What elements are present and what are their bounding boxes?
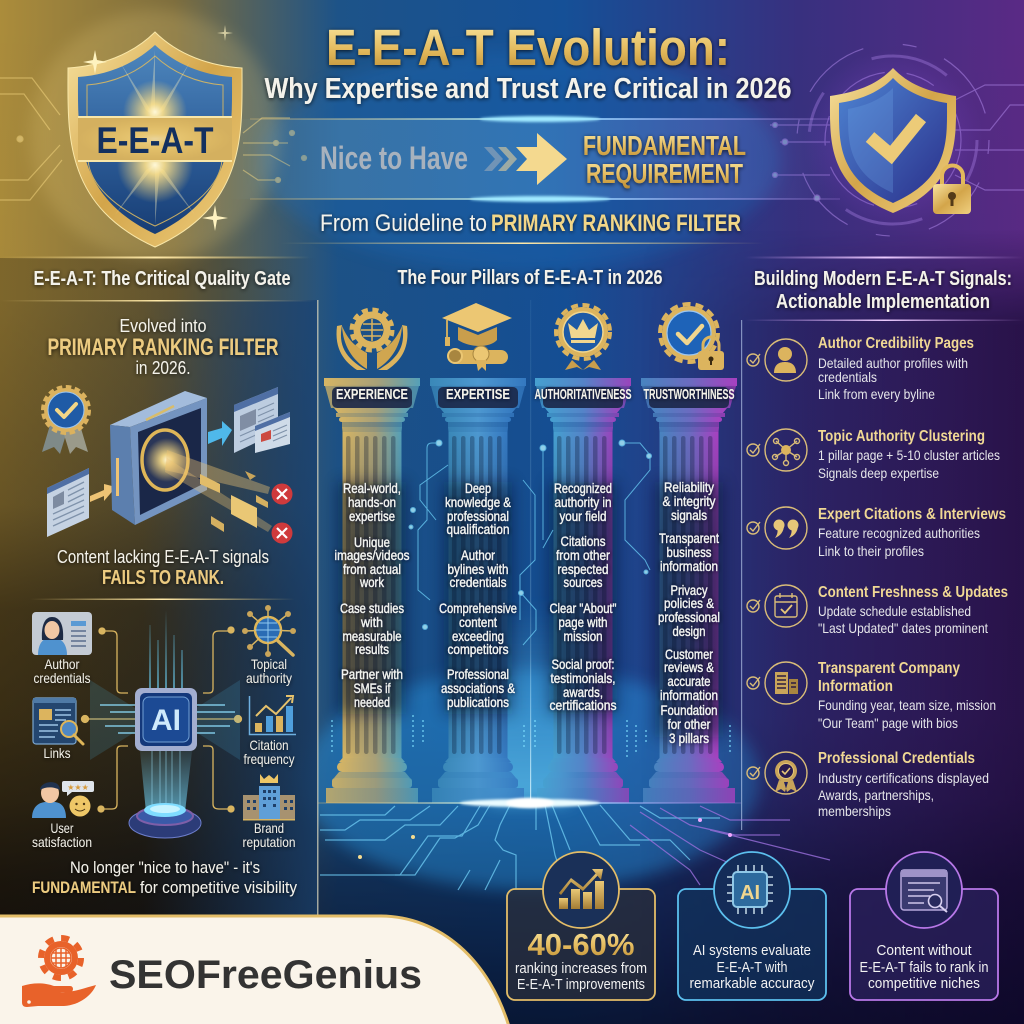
pillar text: trustworthiness: signals bbox=[671, 507, 707, 523]
icon: author credentials bbox=[32, 612, 92, 655]
label: citation frequency: Citation bbox=[250, 737, 288, 753]
signal: content freshness and updates: Update schedule established bbox=[818, 603, 971, 619]
pillar: authoritativeness bbox=[535, 378, 631, 803]
pillar: expertise bbox=[430, 378, 526, 803]
label: author credentials: Author bbox=[44, 656, 80, 672]
pillar text: authoritativeness: Recognized bbox=[554, 480, 612, 496]
brand name: SEOFreeGenius bbox=[109, 953, 422, 997]
icon: approved pages bbox=[234, 387, 290, 453]
panel: right column backdrop bbox=[679, 243, 1024, 1024]
floor glow bbox=[318, 798, 741, 808]
pillar text: experience: needed bbox=[354, 694, 390, 710]
pillar text: trustworthiness: design bbox=[672, 623, 706, 639]
stat card: AI systems: E-E-A-T with bbox=[716, 959, 788, 976]
pillar text: expertise: competitors bbox=[448, 641, 508, 657]
stat card: AI systems bbox=[678, 852, 826, 1000]
pillar text: experience: results bbox=[355, 641, 389, 657]
pillar text: experience: measurable bbox=[342, 628, 402, 644]
label: user satisfaction bbox=[32, 820, 92, 850]
label: author credentials: credentials bbox=[34, 670, 90, 686]
signal: content freshness and updates bbox=[747, 584, 1008, 636]
pillar text: expertise: Author bbox=[461, 547, 495, 563]
signal: author credibility pages bbox=[747, 335, 974, 402]
signal: expert citations and interviews: Link to their profiles bbox=[818, 543, 924, 559]
pillar text: authoritativeness: testimonials, bbox=[550, 670, 616, 686]
icon: user satisfaction bbox=[32, 781, 94, 818]
shift: nice to have to fundamental requirement: FUNDAMENTAL bbox=[583, 130, 746, 161]
pillar text: experience: Partner with bbox=[341, 666, 403, 682]
arrow: into filter bbox=[90, 484, 116, 502]
pillar text: experience bbox=[334, 480, 410, 710]
column headings: E-E-A-T: The Critical Quality Gate bbox=[34, 268, 290, 290]
data sprinkles between pillars bbox=[332, 715, 730, 760]
label: brand reputation bbox=[242, 820, 296, 850]
pillar text: experience: hands-on bbox=[348, 494, 396, 510]
icon: left shield E-E-A-T bbox=[30, 10, 280, 260]
stat card: content without E-E-A-T bbox=[850, 852, 998, 1000]
signal: professional credentials: Industry certifications displayed bbox=[818, 770, 989, 786]
closing statement: for competitive visibility bbox=[140, 878, 297, 897]
pillar text: trustworthiness: information bbox=[660, 687, 718, 703]
signal: transparent company information bbox=[747, 660, 996, 731]
pillar labels: AUTHORITATIVENESS bbox=[534, 386, 632, 403]
icon: page with magnifier bbox=[901, 870, 947, 912]
pillar text: authoritativeness bbox=[550, 480, 617, 713]
pillar text: experience: expertise bbox=[349, 508, 395, 524]
tagline: PRIMARY RANKING FILTER bbox=[491, 210, 741, 237]
label: user satisfaction: satisfaction bbox=[32, 834, 92, 850]
signal: topic authority clustering: Topic Authority Clustering bbox=[818, 428, 985, 445]
connectors bbox=[82, 627, 242, 812]
pillar text: authoritativeness: awards, bbox=[563, 684, 603, 700]
pillar text: authoritativeness: authority in bbox=[554, 494, 612, 510]
column headings bbox=[34, 267, 1012, 313]
label: topical authority bbox=[246, 656, 292, 686]
icon: user satisfaction: ★★★ bbox=[67, 783, 89, 792]
shift: nice to have to fundamental requirement: REQUIREMENT bbox=[586, 158, 743, 189]
signal: expert citations and interviews: Feature recognized authorities bbox=[818, 525, 980, 541]
signal: topic authority clustering bbox=[747, 428, 1000, 481]
signal: author credibility pages: Link from every byline bbox=[818, 386, 935, 402]
pillar text: authoritativeness: respected bbox=[558, 561, 608, 577]
rejected content beams bbox=[165, 450, 272, 532]
icon: right shield with check and lock bbox=[803, 50, 983, 230]
pillar text: trustworthiness: & integrity bbox=[662, 493, 716, 509]
pillar text: expertise bbox=[439, 480, 517, 710]
pillar text: trustworthiness: Reliability bbox=[664, 479, 714, 495]
panel: left column backdrop bbox=[0, 258, 318, 920]
signal: topic authority clustering: Signals deep expertise bbox=[818, 465, 939, 481]
icon: growth chart bbox=[559, 869, 604, 909]
pillar text: expertise: bylines with bbox=[448, 561, 508, 577]
signal: professional credentials: Awards, partnerships, bbox=[818, 787, 934, 803]
title bbox=[264, 19, 792, 105]
pillar labels bbox=[336, 386, 734, 403]
label: citation frequency: frequency bbox=[244, 751, 294, 767]
pillar text: expertise: Professional bbox=[447, 666, 509, 682]
stat card: AI systems: remarkable accuracy bbox=[690, 975, 815, 992]
pillar text: authoritativeness: mission bbox=[564, 628, 602, 644]
icon: experience hands and gear bbox=[337, 310, 407, 370]
panel: quality gate text bottom: FAILS TO RANK. bbox=[102, 567, 224, 589]
tagline bbox=[320, 210, 741, 237]
icon: brand reputation bbox=[243, 774, 295, 820]
shield label: E-E-A-T bbox=[96, 120, 214, 161]
pillar text: authoritativeness: Clear "About" bbox=[550, 600, 617, 616]
floor circuit lines bbox=[320, 805, 830, 890]
signal: author credibility pages: Detailed author profiles with bbox=[818, 355, 968, 371]
pillar text: expertise: qualification bbox=[446, 521, 510, 537]
pillar text: experience: images/videos bbox=[334, 547, 410, 563]
column headings: Actionable Implementation bbox=[776, 291, 990, 313]
pillar text: trustworthiness: accurate bbox=[668, 673, 711, 689]
icon: AI chip bbox=[727, 865, 773, 914]
pillar text: expertise: exceeding bbox=[452, 628, 504, 644]
stat card: AI systems: AI systems evaluate bbox=[693, 942, 811, 959]
label: author credentials bbox=[34, 656, 90, 686]
pillar labels: EXPERIENCE bbox=[336, 386, 408, 403]
label: brand reputation: reputation bbox=[242, 834, 296, 850]
signal: transparent company information: Information bbox=[818, 678, 893, 695]
panel: quality gate text top: in 2026. bbox=[136, 358, 190, 378]
pillar text: experience: SMEs if bbox=[354, 680, 391, 696]
column headings: The Four Pillars of E-E-A-T in 2026 bbox=[398, 267, 662, 289]
pillar text: expertise: Comprehensive bbox=[439, 600, 517, 616]
closing statement: No longer "nice to have" - it's bbox=[70, 858, 260, 877]
AI chip bbox=[135, 688, 197, 751]
label: topical authority: Topical bbox=[251, 656, 287, 672]
pillar text: expertise: credentials bbox=[450, 574, 506, 590]
label: user satisfaction: User bbox=[50, 820, 74, 836]
panel: quality gate text bottom bbox=[57, 547, 269, 589]
subtitle: Why Expertise and Trust Are Critical in 2026 bbox=[264, 73, 792, 105]
stat card: content without E-E-A-T: competitive niches bbox=[868, 975, 980, 992]
pillar text: trustworthiness: reviews & bbox=[664, 659, 715, 675]
pillar text: experience: Real-world, bbox=[343, 480, 401, 496]
panel: quality gate text top bbox=[48, 316, 278, 378]
data streams bbox=[90, 610, 240, 760]
pillar text: authoritativeness: certifications bbox=[550, 697, 616, 713]
pillar text: trustworthiness: business bbox=[666, 544, 712, 560]
stat card: 40-60% bbox=[507, 852, 655, 1000]
pillar text: authoritativeness: your field bbox=[560, 508, 606, 524]
arrow bbox=[484, 133, 567, 185]
pillar circuit accents bbox=[409, 440, 652, 645]
pillar text: trustworthiness: professional bbox=[658, 609, 720, 625]
pillar text: authoritativeness: Citations bbox=[560, 533, 606, 549]
pillar text: expertise: publications bbox=[447, 694, 509, 710]
icon: citation frequency bbox=[250, 696, 296, 734]
arrow: accepted bbox=[208, 421, 232, 446]
icon: incoming article bbox=[47, 468, 89, 537]
label: topical authority: authority bbox=[246, 670, 292, 686]
decorative circuit lines left bbox=[0, 78, 306, 200]
icon: topical authority bbox=[242, 605, 296, 657]
pillar text: authoritativeness: from other bbox=[556, 547, 610, 563]
stat card: content without E-E-A-T: E-E-A-T fails to rank in bbox=[860, 959, 988, 976]
shift: nice to have to fundamental requirement: Nice to Have bbox=[320, 140, 468, 176]
icon: trust check badge with lock bbox=[660, 304, 724, 370]
logo panel bbox=[0, 916, 510, 1024]
decorative circuit lines right bbox=[770, 44, 1024, 236]
icon: expertise graduation cap bbox=[442, 303, 512, 371]
icon: AI chip: AI bbox=[740, 882, 760, 904]
pillar text: experience: from actual bbox=[343, 561, 401, 577]
pillar text: expertise: knowledge & bbox=[445, 494, 512, 510]
signal: professional credentials bbox=[747, 750, 989, 819]
stat card: 40-60%: E-E-A-T improvements bbox=[517, 976, 645, 993]
closing statement: FUNDAMENTAL bbox=[32, 878, 136, 897]
signal: professional credentials: Professional Credentials bbox=[818, 750, 975, 767]
panel: quality gate text top: Evolved into bbox=[120, 316, 206, 336]
signal: author credibility pages: credentials bbox=[818, 369, 877, 385]
pillar text: trustworthiness: Foundation bbox=[660, 702, 718, 718]
icon: medal bbox=[42, 387, 89, 454]
pillar text: trustworthiness: 3 pillars bbox=[669, 730, 709, 746]
pillar text: authoritativeness: page with bbox=[558, 614, 608, 630]
pillar text: expertise: professional bbox=[447, 508, 509, 524]
pillar text: trustworthiness: for other bbox=[668, 716, 711, 732]
pillar text: expertise: content bbox=[459, 614, 497, 630]
diagram: AI signals bbox=[32, 605, 296, 850]
illustration: quality filter gate bbox=[42, 387, 292, 544]
label: links: Links bbox=[44, 745, 70, 761]
shift: nice to have to fundamental requirement bbox=[320, 130, 746, 189]
tagline: From Guideline to bbox=[320, 210, 487, 237]
pillar labels: EXPERTISE bbox=[446, 386, 510, 403]
label: brand reputation: Brand bbox=[254, 820, 284, 836]
transformation band bbox=[230, 116, 840, 202]
label: citation frequency bbox=[244, 737, 294, 767]
pillar text: trustworthiness: information bbox=[660, 558, 718, 574]
pillar text: experience: work bbox=[359, 574, 385, 590]
icon: links bbox=[33, 698, 83, 744]
pillar text: experience: with bbox=[360, 614, 383, 630]
icon: reject marks bbox=[272, 484, 292, 544]
title: E-E-A-T Evolution: bbox=[326, 19, 730, 76]
signal: professional credentials: memberships bbox=[818, 803, 891, 819]
signal: transparent company information: "Our Team" page with bios bbox=[818, 715, 958, 731]
signal: transparent company information: Transparent Company bbox=[818, 660, 960, 677]
pillar text: trustworthiness: Privacy bbox=[670, 582, 708, 598]
pillar text: expertise: Deep bbox=[465, 480, 491, 496]
signal: author credibility pages: Author Credibility Pages bbox=[818, 335, 974, 352]
signal: content freshness and updates: "Last Updated" dates prominent bbox=[818, 620, 988, 636]
icon: authority crown badge bbox=[556, 305, 610, 370]
pillar text: trustworthiness bbox=[658, 479, 720, 746]
pillar text: trustworthiness: Transparent bbox=[659, 530, 719, 546]
dividers bbox=[0, 242, 1024, 600]
pillar text: expertise: associations & bbox=[441, 680, 516, 696]
hologram base bbox=[129, 751, 201, 838]
pillar text: authoritativeness: Social proof: bbox=[552, 656, 614, 672]
signal: expert citations and interviews bbox=[747, 506, 1006, 559]
pillar text: trustworthiness: Customer bbox=[665, 646, 713, 662]
panel: quality gate text bottom: Content lacking E-E-A-T signals bbox=[57, 547, 269, 567]
pillar: experience bbox=[324, 378, 420, 803]
panel: quality gate text top: PRIMARY RANKING FILTER bbox=[48, 334, 278, 361]
pillar: trustworthiness bbox=[641, 378, 737, 803]
pillar labels: TRUSTWORTHINESS bbox=[644, 386, 734, 403]
pillar text: experience: Unique bbox=[354, 534, 390, 550]
pillar text: authoritativeness: sources bbox=[564, 574, 602, 590]
stat card: 40-60%: ranking increases from bbox=[515, 960, 647, 977]
stat card: content without E-E-A-T: Content without bbox=[876, 942, 972, 959]
filter device bbox=[110, 391, 207, 525]
center light column bbox=[490, 300, 570, 803]
icon: logo gear and hand bbox=[22, 938, 96, 1007]
AI chip: AI bbox=[151, 704, 181, 737]
closing statement bbox=[32, 858, 297, 897]
pillar text: trustworthiness: policies & bbox=[664, 595, 715, 611]
pillar text: experience: Case studies bbox=[340, 600, 404, 616]
signal: transparent company information: Founding year, team size, mission bbox=[818, 697, 996, 713]
stat card: 40-60%: 40-60% bbox=[528, 927, 634, 962]
